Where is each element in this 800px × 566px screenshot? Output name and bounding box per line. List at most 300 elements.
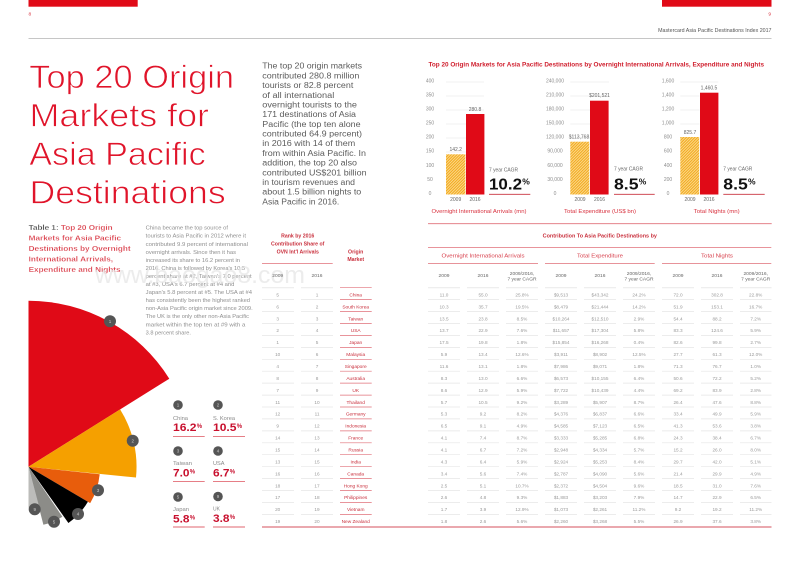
row: USA: 13.7 xyxy=(439,328,449,333)
row: Germany: $6,837 xyxy=(593,412,608,417)
legend item: Taiwan: % xyxy=(190,470,196,476)
marker 1: 1 xyxy=(109,319,112,324)
legend item: Taiwan: 3 xyxy=(177,449,180,454)
segment: Taiwan xyxy=(28,467,100,503)
title: Markets for xyxy=(30,98,209,134)
legend item: Taiwan: Taiwan xyxy=(173,461,192,467)
row: China: China xyxy=(349,292,362,298)
row: Japan: 17.5 xyxy=(439,340,449,345)
row: Russia: $2,948 xyxy=(554,448,569,452)
row: Germany: 5.9% xyxy=(750,412,761,417)
intro text block: Pacific (the top ten alone xyxy=(262,120,361,129)
legend item: UK: % xyxy=(230,515,236,521)
row: China: $9,513 xyxy=(554,292,569,297)
China commentary text block xyxy=(146,226,253,336)
intro text block: contributed US$201 billion xyxy=(262,168,367,177)
row: Indonesia: 41.3 xyxy=(673,424,683,429)
row: China: 22.8% xyxy=(749,292,762,297)
bar chart: total nights: 2016 xyxy=(703,197,715,203)
legend item: China xyxy=(173,400,205,436)
marker 2: 2 xyxy=(131,438,134,443)
row: USA: 5.9% xyxy=(750,328,761,333)
row: India: 8.4% xyxy=(634,459,644,464)
row: India: $2,924 xyxy=(554,459,569,464)
row: Malaysia: 27.7 xyxy=(673,352,683,357)
row: Australia: 6.6% xyxy=(517,376,527,381)
bar chart: overnight international arrivals: 200 xyxy=(426,135,434,141)
marker 5 xyxy=(48,516,60,528)
row: Thailand: 11 xyxy=(275,400,281,405)
intro text block: contributed 64.9 percent) xyxy=(262,130,362,138)
row: Taiwan: 8.5% xyxy=(517,316,527,321)
row: Germany: 11 xyxy=(315,412,320,417)
row: Malaysia: 12.0% xyxy=(749,352,762,357)
row: New Zealand: 5.6% xyxy=(517,519,527,524)
row: South Korea: 16.7% xyxy=(749,304,762,309)
row: UK: 7 xyxy=(276,388,279,393)
row: USA: 4 xyxy=(316,328,319,333)
row: Malaysia xyxy=(275,352,762,358)
row: Japan: 0.4% xyxy=(634,340,644,345)
legend item: Japan: 5 xyxy=(177,495,180,500)
row: Japan: 1.8% xyxy=(517,340,527,345)
row: USA xyxy=(276,328,761,334)
row: Hong Kong: 9.6% xyxy=(634,483,644,488)
row: Thailand: 10 xyxy=(314,400,320,405)
column headers: 2016 xyxy=(478,273,489,279)
bar chart: overnight international arrivals: 400 xyxy=(426,78,434,84)
bar chart: total nights: 600 xyxy=(664,149,672,155)
bar chart: overnight international arrivals: 2009 xyxy=(450,197,461,203)
row: China: 55.0 xyxy=(478,292,488,297)
bar chart: total expenditure: 0 xyxy=(554,191,557,197)
row: UK: 9 xyxy=(316,388,319,393)
China commentary text block: overnight arrivals. Since then it has xyxy=(146,250,236,256)
row: Australia: $10,155 xyxy=(592,376,609,381)
bar chart: overnight international arrivals xyxy=(426,78,530,215)
bar chart: total nights: 2009 xyxy=(684,197,696,203)
table heading: rank: Contribution Share of xyxy=(271,241,325,247)
bar chart: total expenditure: Total Expenditure (US$ bn) xyxy=(564,209,636,215)
row: Thailand: 9.2% xyxy=(517,400,527,405)
row: Hong Kong: 10.7% xyxy=(515,483,529,488)
bar chart: total nights: 200 xyxy=(664,177,672,183)
row: Philippines xyxy=(275,495,761,501)
intro text block: in 2016 with 14 of them xyxy=(262,139,356,148)
bar chart: overnight international arrivals: 250 xyxy=(426,121,434,127)
bar 2016 xyxy=(466,114,484,194)
row: South Korea xyxy=(276,304,762,310)
page number left: 8 xyxy=(28,12,32,18)
row: Russia: 4.1 xyxy=(441,448,448,452)
segment: Japan xyxy=(28,467,62,525)
row: Germany: 5.3 xyxy=(441,412,448,417)
row: India: 5.9% xyxy=(517,459,527,464)
row: Japan: 99.8 xyxy=(712,340,722,345)
row: UK: 5.9% xyxy=(517,388,527,393)
marker 9 xyxy=(29,503,41,515)
row: Germany: 12 xyxy=(275,412,281,417)
intro text block: Asia Pacific in 2016. xyxy=(262,197,339,206)
row: Philippines: $1,883 xyxy=(554,495,569,500)
bar chart: total expenditure: $201,521 xyxy=(589,93,610,99)
legend item: S. Korea: 2 xyxy=(217,403,220,408)
row: Singapore: 11.6 xyxy=(440,364,449,369)
row: Japan: $15,854 xyxy=(553,340,570,345)
bar 2009 xyxy=(446,154,465,194)
bar chart: total expenditure: 30,000 xyxy=(547,177,563,183)
row: Philippines: 14.7 xyxy=(673,495,683,500)
intro text block: contributed 280.8 million xyxy=(262,71,359,80)
row: Philippines: 9.3% xyxy=(517,495,527,500)
CAGR callout: 7 year CAGR xyxy=(614,166,643,172)
legend item: USA: % xyxy=(230,470,236,476)
row: Philippines: 17 xyxy=(275,495,281,500)
legend item: USA: USA xyxy=(213,461,225,467)
row: Thailand xyxy=(275,400,761,406)
row: Malaysia: $8,902 xyxy=(593,352,608,357)
row: South Korea: South Korea xyxy=(342,304,369,310)
row: Thailand: 8.8% xyxy=(750,400,761,405)
table heading: origin market xyxy=(347,249,364,263)
row: New Zealand xyxy=(275,519,761,525)
row: Hong Kong: $4,504 xyxy=(593,483,608,488)
marker 4: 4 xyxy=(77,512,80,517)
row: Thailand: $5,907 xyxy=(593,400,608,405)
China commentary text block: China became the top source of xyxy=(146,226,229,232)
row: Russia xyxy=(275,448,761,454)
column headers: 2009/2016, xyxy=(510,271,534,277)
legend item: Taiwan: 7.0 xyxy=(173,468,190,480)
row: South Korea: 6 xyxy=(276,304,279,309)
bar chart: overnight international arrivals: 100 xyxy=(426,163,434,169)
row: Vietnam: 20 xyxy=(275,507,281,512)
CAGR callout: % xyxy=(522,176,530,186)
bar chart: total expenditure: 240,000 xyxy=(546,78,564,84)
column headers xyxy=(272,271,771,283)
CAGR callout xyxy=(489,168,530,194)
group header: overnight arrivals: Overnight International Arrivals xyxy=(442,253,525,259)
row: India: 4.3 xyxy=(441,459,448,464)
row: Indonesia xyxy=(276,424,761,430)
row: South Korea: $21,444 xyxy=(592,304,609,309)
legend item: Japan xyxy=(173,492,205,527)
row: Germany: 33.4 xyxy=(673,412,683,417)
legend item: USA xyxy=(213,446,245,481)
bar chart: total expenditure: 210,000 xyxy=(546,92,564,98)
row: Philippines: 2.6 xyxy=(441,495,448,500)
row: Singapore: $9,071 xyxy=(593,364,608,369)
row: New Zealand: $2,260 xyxy=(554,519,569,524)
row: Taiwan: 7.2% xyxy=(750,316,761,321)
row: Vietnam: $1,073 xyxy=(554,507,569,512)
row: New Zealand: New Zealand xyxy=(342,519,370,525)
marker 4 xyxy=(72,508,84,520)
row: New Zealand: 5.5% xyxy=(634,519,644,524)
row: Hong Kong: 7.6% xyxy=(750,483,761,488)
row: Australia: 50.6 xyxy=(673,376,683,381)
intro text block: The top 20 origin markets xyxy=(262,62,362,71)
intro text block: of all international xyxy=(262,91,335,100)
table title: Expenditure and Nights xyxy=(29,265,121,274)
header band: right red tab xyxy=(662,0,772,7)
row: Taiwan: 3 xyxy=(316,316,319,321)
column headers: 7 year CAGR xyxy=(624,277,654,283)
CAGR callout: 8.5 xyxy=(723,176,748,194)
row: Canada: 5.6 xyxy=(480,471,487,476)
row: UK: 4.4% xyxy=(634,388,644,393)
row: Singapore: 1.0% xyxy=(750,364,761,369)
row: Philippines: 4.8 xyxy=(480,495,487,500)
row: Japan xyxy=(276,340,761,346)
China commentary text block: tourists to Asia Pacific in 2012 where it xyxy=(146,234,247,240)
data table xyxy=(262,233,772,527)
CAGR callout: % xyxy=(748,176,756,186)
table heading: contribution: Contribution To Asia Pacific Destinations by xyxy=(543,233,657,239)
CAGR callout xyxy=(723,166,765,194)
row: Singapore: 71.3 xyxy=(673,364,683,369)
page number right: 9 xyxy=(768,12,771,18)
row: Japan: $16,268 xyxy=(592,340,609,345)
bar chart: total nights: 400 xyxy=(664,163,672,169)
row: Russia: $4,334 xyxy=(593,448,608,452)
row: New Zealand: 1.8 xyxy=(441,519,448,524)
legend item: Japan: 5.8 xyxy=(173,514,190,526)
row: UK: UK xyxy=(352,388,360,394)
row: Indonesia: $4,585 xyxy=(554,424,569,429)
bar chart: overnight international arrivals: 300 xyxy=(426,107,434,113)
row: Australia: 13.0 xyxy=(478,376,488,381)
table heading: origin market: Market xyxy=(347,257,364,263)
row: USA: $11,657 xyxy=(553,328,570,333)
row: Singapore xyxy=(276,364,761,370)
bar chart: total nights: 825.7 xyxy=(684,130,696,136)
row: Taiwan: 3 xyxy=(276,316,279,321)
row: Canada: 5.6% xyxy=(634,471,644,476)
legend item: UK: 9 xyxy=(217,494,220,499)
row: China: 72.0 xyxy=(673,292,683,297)
legend xyxy=(173,400,245,527)
column headers: 2016 xyxy=(712,273,723,279)
row: Malaysia: 13.4 xyxy=(478,352,488,357)
row: UK: $10,439 xyxy=(592,388,609,393)
row: New Zealand: 20 xyxy=(314,519,320,524)
row: Philippines: Philippines xyxy=(344,495,368,501)
row: Taiwan: 13.5 xyxy=(439,316,449,321)
row: Australia xyxy=(276,376,761,382)
row: Australia: 8 xyxy=(316,376,319,381)
row: Singapore: 76.7 xyxy=(712,364,722,369)
row: Germany: 8.2% xyxy=(517,412,527,417)
row: Malaysia: 12.6% xyxy=(515,352,529,357)
intro text block: about 1.5 billion nights to xyxy=(262,188,362,197)
table heading: rank xyxy=(271,233,325,255)
row: Vietnam: 1.7 xyxy=(441,507,448,512)
row: Canada: Canada xyxy=(347,471,364,477)
row: Taiwan: Taiwan xyxy=(348,316,363,322)
row: Canada: 7.4% xyxy=(517,471,527,476)
column headers: 7 year CAGR xyxy=(507,277,537,283)
column headers: 7 year CAGR xyxy=(741,277,771,283)
column headers: 2009 xyxy=(439,273,450,279)
legend item: Japan: % xyxy=(190,516,196,522)
row: Indonesia: 3.8% xyxy=(750,424,761,429)
bar chart: total nights: 1,600 xyxy=(662,78,674,84)
row: South Korea: $8,479 xyxy=(554,304,569,309)
row: Thailand: 5.7 xyxy=(441,400,448,405)
row: Philippines: 7.9% xyxy=(634,495,644,500)
legend item: China: % xyxy=(197,424,203,430)
row: Australia: Australia xyxy=(346,376,365,382)
header band: left red tab xyxy=(28,0,138,7)
CAGR callout: 8.5 xyxy=(614,176,639,194)
row: South Korea: 14.2% xyxy=(632,304,646,309)
bar chart: overnight international arrivals: 150 xyxy=(426,149,434,155)
row: Russia: 15.2 xyxy=(673,448,683,452)
row: Japan: Japan xyxy=(349,340,363,346)
legend item: S. Korea xyxy=(213,400,245,436)
bar chart: total nights: 1,400 xyxy=(662,92,674,98)
CAGR callout: 7 year CAGR xyxy=(723,166,753,172)
column headers: 2009/2016, xyxy=(743,271,768,277)
row: USA: 7.6% xyxy=(517,328,527,333)
intro text block: addition, the top 20 also xyxy=(262,159,358,168)
segment: China xyxy=(28,301,169,467)
bar chart: overnight international arrivals: 50 xyxy=(427,177,433,183)
bar chart: total expenditure xyxy=(546,78,655,215)
row: Canada: 29.9 xyxy=(712,471,722,476)
row: Japan: 1 xyxy=(276,340,279,345)
table title: Table 1: Top 20 Origin xyxy=(29,223,113,232)
row: UK: $7,722 xyxy=(554,388,569,393)
title: Top 20 Origin xyxy=(29,59,234,95)
row: France: $3,333 xyxy=(554,436,569,441)
row: Australia: 8 xyxy=(276,376,279,381)
row: Malaysia: 10 xyxy=(275,352,281,357)
segment: UK xyxy=(28,467,39,508)
row: Australia: 5.2% xyxy=(750,376,761,381)
row: Japan: 2.7% xyxy=(750,340,761,345)
row: Vietnam: 11.2% xyxy=(749,507,762,512)
bar 2009 xyxy=(680,137,699,194)
bar 2009 xyxy=(570,142,589,194)
row: Vietnam: Vietnam xyxy=(347,507,364,513)
row: China: 5 xyxy=(276,292,279,297)
bar chart: total nights: 1,460.5 xyxy=(701,86,718,92)
row: New Zealand: 3.8% xyxy=(750,519,761,524)
row: UK xyxy=(276,388,761,394)
row: India: $5,253 xyxy=(593,459,608,464)
bar chart: overnight international arrivals: 0 xyxy=(429,191,432,197)
row: Thailand: 8.7% xyxy=(634,400,644,405)
CAGR callout: 10.2 xyxy=(489,176,522,194)
row: Vietnam xyxy=(275,507,762,513)
row: Malaysia: 5.9 xyxy=(441,352,448,357)
China commentary text block: at #3, USA's 6.7 percent at #4 and xyxy=(146,282,235,288)
bar chart: total expenditure: 60,000 xyxy=(547,163,563,169)
row: Hong Kong: 17 xyxy=(314,483,320,488)
running header: Mastercard Asia Pacific Destinations Index 2017 xyxy=(658,28,772,34)
row: Japan: 19.8 xyxy=(478,340,488,345)
row: South Korea: 2 xyxy=(316,304,319,309)
row: Canada: $4,090 xyxy=(593,471,608,476)
China commentary text block: market within the top ten at #9 with a xyxy=(146,322,246,328)
row: Vietnam: 19 xyxy=(314,507,320,512)
intro text block: overnight tourists to the xyxy=(262,100,358,110)
row: USA: 2 xyxy=(276,328,279,333)
bar chart: total expenditure: 120,000 xyxy=(546,135,564,141)
marker 9: 9 xyxy=(33,507,36,512)
bar chart: total nights: Total Nights (mn) xyxy=(694,209,740,215)
row: Hong Kong: Hong Kong xyxy=(344,483,368,489)
legend item: UK xyxy=(213,492,245,527)
row: New Zealand: $3,268 xyxy=(593,519,608,524)
row: France: 14 xyxy=(275,436,281,441)
row: Indonesia: 4.9% xyxy=(517,424,527,429)
row: Singapore: 13.1 xyxy=(478,364,488,369)
row: Canada: 4.9% xyxy=(750,471,761,476)
watermark: www.baogao8.com xyxy=(94,262,305,289)
row: South Korea: 10.3 xyxy=(439,304,449,309)
bar chart: total expenditure: 2009 xyxy=(574,197,586,203)
row: Canada: $2,787 xyxy=(554,471,569,476)
row: Germany: Germany xyxy=(346,412,366,418)
intro text block: tourists or 82.8 percent xyxy=(262,81,354,90)
China commentary text block: has consistently been the highest ranked xyxy=(146,298,250,304)
row: New Zealand: 37.6 xyxy=(712,519,722,524)
row: Germany: 6.6% xyxy=(634,412,644,417)
row: USA: 22.9 xyxy=(478,328,488,333)
China commentary text block: non-Asia Pacific origin market since 2009. xyxy=(146,306,253,312)
legend item: S. Korea: % xyxy=(237,424,243,430)
segment: S. Korea xyxy=(28,409,137,478)
row: France: France xyxy=(348,436,363,442)
row: India xyxy=(275,459,761,465)
bar chart: overnight international arrivals: 2016 xyxy=(469,197,481,203)
row: Indonesia: 6.5 xyxy=(441,424,448,429)
row: France xyxy=(275,436,761,442)
row: South Korea: 51.9 xyxy=(673,304,683,309)
row: Germany: 49.9 xyxy=(712,412,722,417)
legend item: Japan: Japan xyxy=(173,507,189,513)
row: Taiwan: 23.8 xyxy=(478,316,488,321)
row: Vietnam: 3.9 xyxy=(480,507,487,512)
row: Hong Kong: 2.5 xyxy=(441,483,448,488)
row: New Zealand: 26.9 xyxy=(673,519,683,524)
row: Taiwan: $10,264 xyxy=(553,316,570,321)
table heading: origin market: Origin xyxy=(348,249,363,255)
legend item: USA: 4 xyxy=(217,449,220,454)
column headers: 2016 xyxy=(312,273,323,279)
bar chart: total nights: 0 xyxy=(667,191,670,197)
row: Hong Kong: $2,372 xyxy=(554,483,569,488)
legend item: S. Korea: 10.5 xyxy=(213,422,236,434)
row: Germany: $4,376 xyxy=(554,412,569,417)
row: Indonesia: 9 xyxy=(276,424,279,429)
column headers: 2009 xyxy=(556,273,567,279)
row: Philippines: 6.5% xyxy=(750,495,761,500)
row: Thailand: 47.6 xyxy=(712,400,722,405)
row: UK: 2.8% xyxy=(750,388,761,393)
bar chart: overnight international arrivals: 280.8 xyxy=(469,107,481,113)
row: Singapore: 7 xyxy=(316,364,319,369)
row: Philippines: 18 xyxy=(314,495,320,500)
bar chart: total expenditure: 180,000 xyxy=(546,107,564,113)
row: UK: 8.6 xyxy=(441,388,448,393)
row: South Korea: 153.1 xyxy=(711,304,723,309)
row: India: 5.1% xyxy=(750,459,761,464)
row: China xyxy=(276,292,762,298)
